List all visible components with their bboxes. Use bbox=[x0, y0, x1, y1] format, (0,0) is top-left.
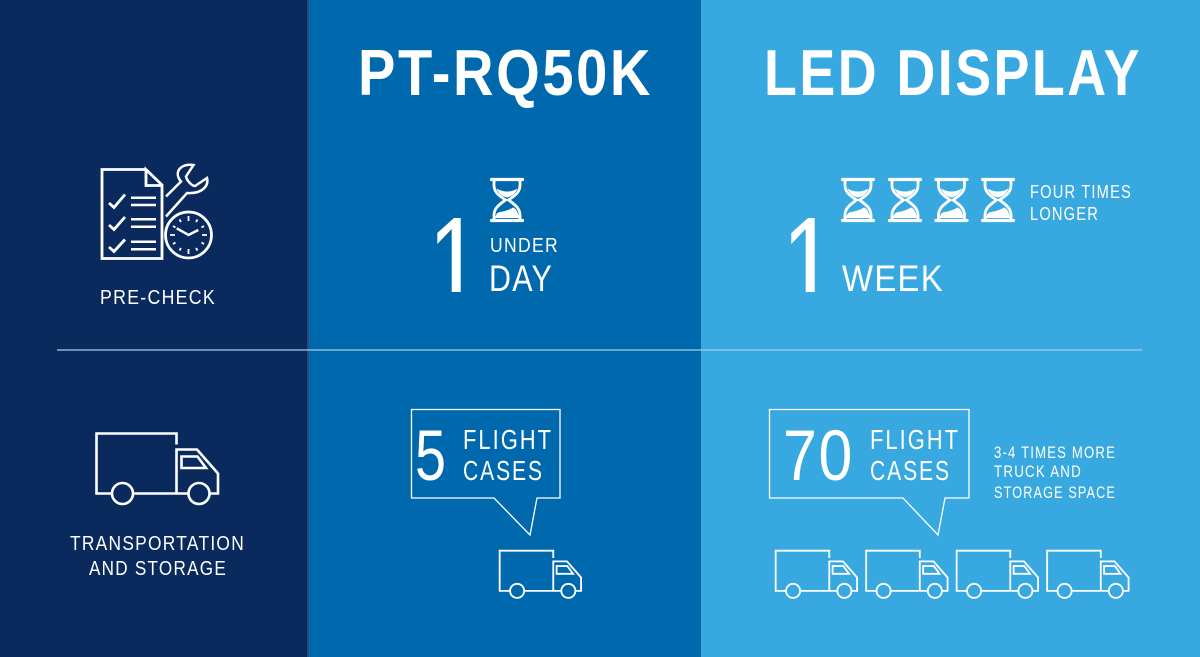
callout: 70 flight cases: FLIGHT bbox=[870, 424, 960, 455]
number 1 bbox=[437, 218, 461, 292]
callout: 5 flight cases: 5 bbox=[415, 417, 446, 496]
text: truck and storage note bbox=[994, 444, 1116, 502]
icon: hourglass bbox=[492, 180, 522, 220]
icon: one truck bbox=[500, 551, 581, 598]
callout: 5 flight cases: CASES bbox=[463, 455, 544, 486]
panel: row labels bbox=[0, 0, 308, 657]
text: truck and storage note: STORAGE SPACE bbox=[994, 484, 1116, 502]
text: day: DAY bbox=[489, 257, 553, 299]
icon: large truck bbox=[96, 434, 218, 504]
callout: 70 flight cases: 70 bbox=[783, 417, 854, 496]
panel: LED Display bbox=[701, 0, 1200, 657]
label: transportation and storage bbox=[70, 532, 245, 580]
label: pre-check: PRE-CHECK bbox=[100, 286, 216, 309]
text: under: UNDER bbox=[490, 235, 559, 257]
text: four times longer bbox=[1030, 181, 1132, 224]
callout: 70 flight cases bbox=[770, 410, 969, 535]
text: four times longer: FOUR TIMES bbox=[1030, 181, 1132, 202]
number 1 bbox=[791, 218, 815, 292]
callout: 5 flight cases: FLIGHT bbox=[463, 424, 553, 455]
panel: PT-RQ50K bbox=[308, 0, 701, 657]
callout: 70 flight cases: CASES bbox=[870, 455, 951, 486]
text: four times longer: LONGER bbox=[1030, 203, 1099, 224]
callout: 5 flight cases bbox=[412, 410, 560, 535]
heading: PT-RQ50K: PT-RQ50K bbox=[358, 36, 653, 109]
label: transportation and storage: AND STORAGE bbox=[89, 557, 227, 580]
stat: 1 week bbox=[791, 180, 1132, 299]
text: truck and storage note: 3-4 TIMES MORE bbox=[994, 444, 1116, 462]
label: transportation and storage: TRANSPORTATION bbox=[70, 532, 245, 555]
icon: pre-check checklist with wrench and clock bbox=[102, 165, 212, 258]
icons: four hourglasses bbox=[842, 180, 1014, 220]
icons: four trucks bbox=[776, 551, 1129, 598]
text: week: WEEK bbox=[842, 257, 944, 299]
stat: under 1 day bbox=[437, 180, 559, 299]
text: truck and storage note: TRUCK AND bbox=[994, 463, 1082, 481]
